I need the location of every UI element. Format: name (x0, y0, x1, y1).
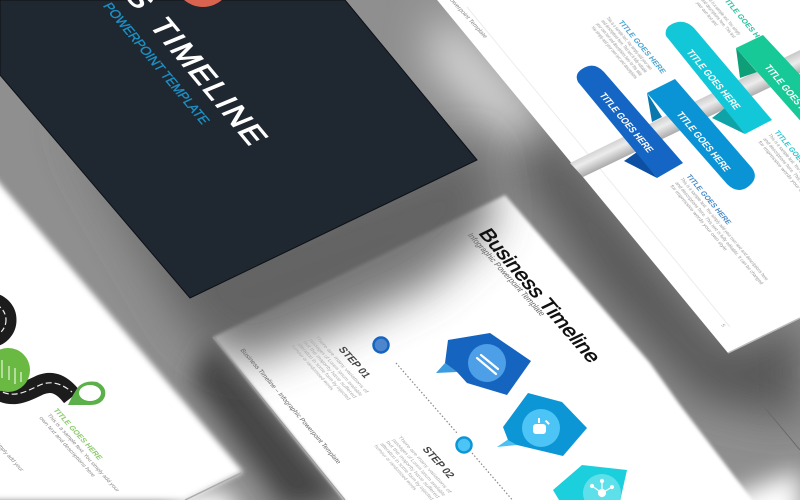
step 1 text (289, 335, 370, 401)
ribbon: teal: TITLE GOES HERE (683, 49, 742, 112)
step 2 text: humour or randomised words (372, 444, 418, 492)
step 2 text: passages of Lorem Ipsum available (390, 438, 447, 497)
heading: business timeline: Business Timeline (473, 226, 605, 366)
icon: red circle (184, 0, 222, 7)
title and text: TITLE GOES HERE (51, 407, 105, 461)
label: title top left (589, 16, 668, 80)
ribbon: dark blue: TITLE GOES HERE (596, 92, 655, 155)
footer rule (213, 337, 345, 500)
title and text: own text and descriptions here (37, 416, 96, 478)
label: title lower middle: This is a sample text. You simply add your own text and descriptions here (678, 177, 770, 282)
shadow of dark slide (60, 110, 495, 365)
ribbon: dark blue (577, 66, 683, 178)
label: title top right (695, 0, 761, 38)
step 2 text (372, 435, 453, 500)
panel: right slide (433, 0, 800, 353)
icon: cup (533, 418, 550, 434)
step 1 text: humour or randomised words (289, 344, 335, 392)
label: title top left: This is a sample text. You simply add your own (604, 16, 654, 71)
step marker 1 (374, 338, 388, 352)
label: title top left: You simply add your own text and descriptions (589, 25, 639, 80)
ribbon: mid blue (647, 79, 755, 190)
ribbon: green (736, 35, 800, 127)
label: title top left: and descriptions here. This text is fully editable (599, 19, 649, 74)
label: title lower middle: for impressive words your own style (668, 184, 729, 252)
step 2 label: STEP 02 (419, 446, 456, 480)
label: title lower middle: and descriptions here. This text is fully editable. It can be changed (673, 181, 765, 286)
step 1 text: alteration in some form by injected (295, 342, 352, 401)
footer text: Business Timeline – Infographic Powerpoint Template (238, 348, 342, 465)
hexagon marker 3 (553, 465, 627, 500)
ribbon: mid blue: TITLE GOES HERE (673, 111, 732, 174)
panel: lower right slide corner (737, 411, 800, 500)
subheading: Infographic Powerpoint Template (465, 232, 548, 317)
road (0, 303, 72, 397)
label: title top right: your own text and (694, 1, 719, 27)
cover subtitle: POWERPOINT TEMPLATE (100, 0, 213, 127)
icon: network (590, 480, 614, 496)
label: title top left: your own text and descriptions here for this slide (594, 22, 644, 77)
step 1 text: but the majority have suffered (301, 340, 358, 399)
label: title top left: TITLE GOES HERE (616, 19, 668, 75)
hexagon marker 2 (497, 393, 587, 456)
ribbon: teal (666, 22, 772, 134)
step 1 label: STEP 01 (335, 346, 372, 380)
label: title lower middle: TITLE GOES HERE (684, 173, 734, 226)
hexagon marker 1 (436, 333, 531, 395)
step 2 text: There are many variations of (396, 435, 453, 495)
step 1 text: passages of Lorem Ipsum available (307, 338, 364, 397)
dotted timeline (396, 363, 515, 500)
step 1 text: There are many variations of (313, 335, 370, 395)
panel: middle slide content (213, 226, 627, 500)
green milestone (0, 348, 30, 392)
label: title lower right (758, 130, 800, 192)
map pin (68, 382, 105, 405)
step marker 2 (456, 438, 472, 452)
step 2 text: but the majority have suffered (384, 440, 441, 499)
panel: left slide (0, 172, 243, 500)
panel: left slide content (0, 303, 120, 493)
step 2 text: alteration in some form by injected (378, 442, 435, 500)
icon: stapler (477, 355, 498, 374)
panel: dark cover slide (0, 0, 477, 298)
pipe (570, 50, 800, 177)
panel: middle slide base (213, 195, 760, 500)
title and text: This is a sample text. You simply add your (45, 413, 120, 493)
page number: 5 (719, 323, 727, 328)
